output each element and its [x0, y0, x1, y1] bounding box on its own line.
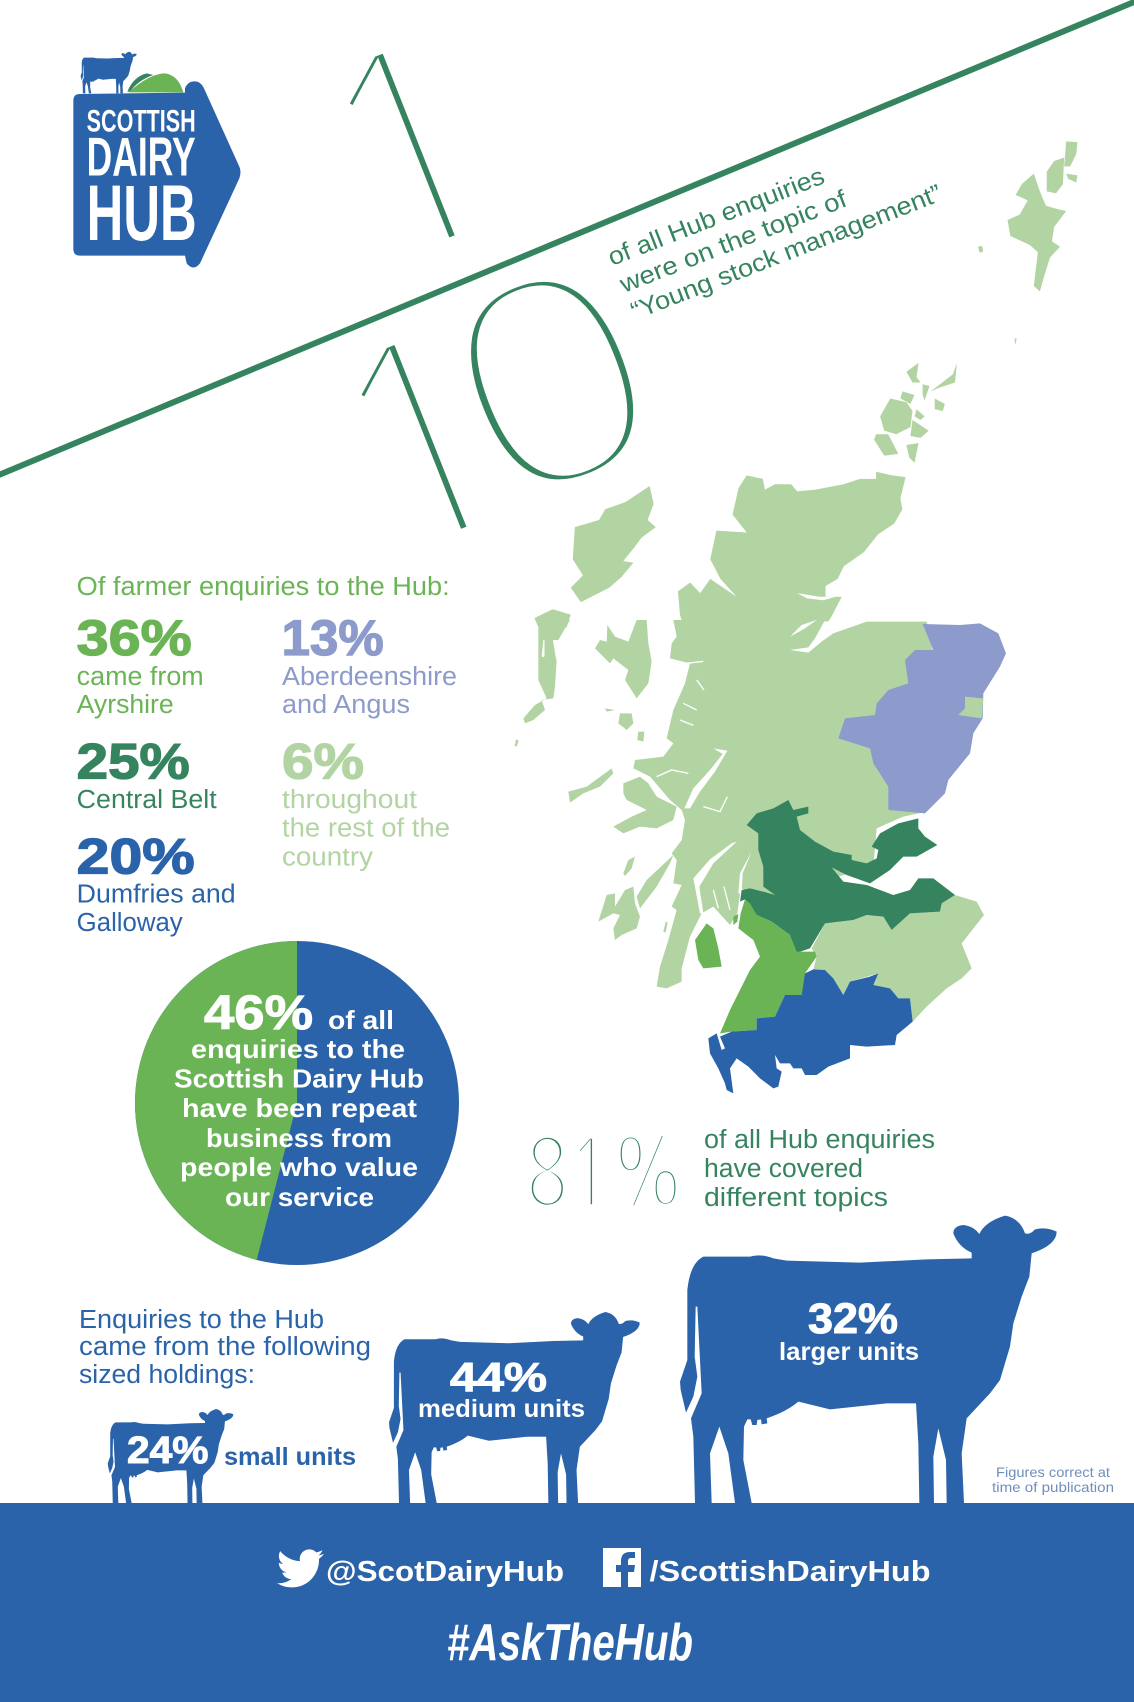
- stat: 6 percent rest of the country: 6%: [282, 734, 364, 790]
- stat: 36 percent Ayrshire: Ayrshire: [77, 691, 174, 719]
- stat: 25 percent Central Belt: [77, 734, 217, 814]
- pie chart: 46 percent repeat business: 46%: [204, 987, 313, 1040]
- icon: twitter bird: [277, 1549, 324, 1587]
- stat: 20 percent Dumfries and Galloway: 20%: [77, 828, 195, 884]
- stat: 20 percent Dumfries and Galloway: [77, 828, 236, 937]
- map region: Central Belt: [740, 800, 955, 953]
- stat: 81 percent different topics: of all Hub enquiries: [704, 1126, 935, 1154]
- pie chart: 46 percent repeat business: business from: [206, 1123, 392, 1153]
- large cow: 32 percent larger units: 32%: [808, 1295, 898, 1343]
- pie chart: 46 percent repeat business: our service: [225, 1182, 374, 1212]
- map: inlets: [684, 620, 817, 913]
- stat: 6 percent rest of the country: country: [282, 844, 373, 872]
- hashtag: #AskTheHub: [447, 1614, 693, 1672]
- map of Scotland: [515, 141, 1077, 1093]
- large cow: 32 percent larger units: larger units: [779, 1338, 919, 1366]
- stat: 13 percent Aberdeenshire and Angus: [282, 610, 457, 719]
- medium cow: 44 percent medium units: [389, 1312, 640, 1503]
- pie chart: 46 percent repeat business: [135, 941, 459, 1265]
- icon: facebook: [603, 1548, 641, 1587]
- pie chart: 46 percent repeat business: of all: [328, 1005, 394, 1035]
- twitter handle: @ScotDairyHub: [326, 1556, 564, 1588]
- stat: 36 percent Ayrshire: 36%: [77, 610, 192, 666]
- map region: Dumfries and Galloway: [708, 969, 913, 1093]
- footnote: time of publication: [992, 1479, 1114, 1495]
- map region: Borders, rest of the country: [812, 895, 984, 1022]
- heading: holding sizes: Enquiries to the Hub: [79, 1306, 324, 1334]
- pie chart: 46 percent repeat business: enquiries to the: [191, 1034, 405, 1064]
- stat: 81 percent different topics: [526, 1126, 935, 1220]
- large numeral zero of the ten: 0: [405, 215, 700, 554]
- small cow: 24 percent small units: small units: [224, 1443, 356, 1471]
- logo: Scottish Dairy Hub: [73, 73, 240, 267]
- stat: 13 percent Aberdeenshire and Angus: Aberdeenshire: [282, 663, 457, 691]
- stat: 25 percent Central Belt: Central Belt: [77, 786, 217, 814]
- map region: Ayrshire with Arran: [695, 899, 817, 1033]
- stat: 81 percent different topics: 81%: [526, 1126, 686, 1220]
- pie chart: 46 percent repeat business: Scottish Dairy Hub: [174, 1064, 424, 1094]
- stat: 36 percent Ayrshire: came from: [77, 663, 204, 691]
- facebook handle: /ScottishDairyHub: [650, 1556, 930, 1588]
- heading: holding sizes: came from the following: [79, 1333, 371, 1361]
- heading: holding sizes: [79, 1306, 371, 1389]
- stat: 81 percent different topics: have covered: [704, 1155, 863, 1183]
- stat: 13 percent Aberdeenshire and Angus: and Angus: [282, 691, 410, 719]
- heading: farmer enquiries: Of farmer enquiries to the Hub:: [77, 573, 450, 601]
- stat: 6 percent rest of the country: [282, 734, 450, 872]
- large numeral one of the fraction: 1: [279, 0, 540, 315]
- stat: 20 percent Dumfries and Galloway: Dumfries and: [77, 881, 236, 909]
- logo: Scottish Dairy Hub: SCOTTISH: [87, 103, 196, 139]
- icon: logo cow: [81, 52, 137, 93]
- heading: holding sizes: sized holdings:: [79, 1361, 255, 1389]
- stat: 36 percent Ayrshire: [77, 610, 204, 719]
- logo: Scottish Dairy Hub: HUB: [87, 168, 197, 257]
- pie chart: 46 percent repeat business: people who value: [180, 1152, 418, 1182]
- map: southern mainland and islands: [515, 620, 1006, 1093]
- caption: young stock management: of all Hub enquiries: [604, 162, 828, 272]
- map: northern mainland and islands: [534, 141, 1077, 680]
- footnote: [992, 1464, 1114, 1495]
- medium cow: 44 percent medium units: 44%: [450, 1354, 547, 1400]
- pie chart: 46 percent repeat business: have been repeat: [182, 1093, 417, 1123]
- map region: Aberdeenshire and Angus: [838, 623, 1006, 813]
- footnote: Figures correct at: [996, 1464, 1110, 1480]
- diagonal fraction line: [0, 0, 1134, 477]
- stat: 81 percent different topics: different topics: [704, 1184, 888, 1212]
- stat: 25 percent Central Belt: 25%: [77, 734, 190, 790]
- large numeral one of the ten: 1: [291, 283, 552, 606]
- small cow: 24 percent small units: [108, 1409, 356, 1503]
- stat: 20 percent Dumfries and Galloway: Galloway: [77, 909, 183, 937]
- caption: young stock management: were on the topic of: [615, 185, 851, 299]
- stat: 6 percent rest of the country: the rest of the: [282, 815, 450, 843]
- small cow: 24 percent small units: 24%: [127, 1430, 208, 1472]
- caption: young stock management: “Young stock management”: [627, 179, 946, 326]
- large cow: 32 percent larger units: [680, 1216, 1057, 1503]
- logo: Scottish Dairy Hub: DAIRY: [87, 127, 196, 188]
- stat: 6 percent rest of the country: throughout: [282, 786, 417, 814]
- medium cow: 44 percent medium units: medium units: [418, 1395, 585, 1423]
- footer band: [0, 1503, 1134, 1702]
- stat: 13 percent Aberdeenshire and Angus: 13%: [282, 610, 384, 666]
